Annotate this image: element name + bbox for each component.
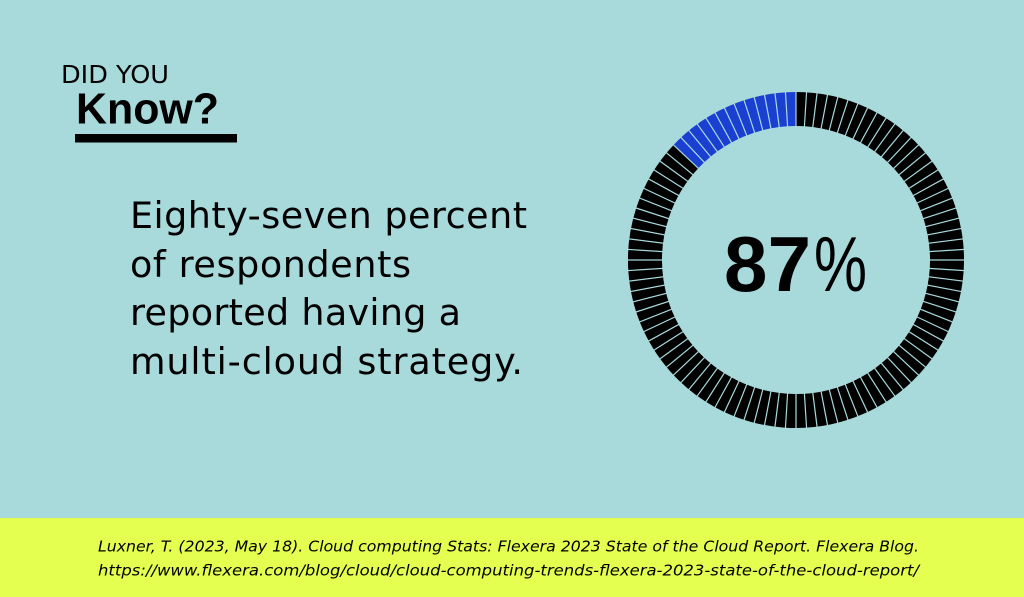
citation text: https://www.flexera.com/blog/cloud/cloud-computing-trends-flexera-2023-state-of-the-cloud-report/: [98, 562, 921, 580]
heading line: know: Know?: [76, 84, 219, 134]
gauge value: %: [814, 220, 867, 308]
text block: statistic statement: reported having a: [130, 291, 461, 334]
text block: statistic statement: multi-cloud strategy.: [130, 340, 523, 383]
heading: did you know: [61, 60, 237, 142]
text block: statistic statement: of respondents: [130, 243, 411, 286]
gauge value: [724, 220, 867, 308]
citation text: Luxner, T. (2023, May 18). Cloud computing Stats: Flexera 2023 State of the Cloud Report. Flexera Blog.: [98, 538, 919, 556]
gauge value: 87: [724, 220, 811, 308]
black arc: 87 percent: [645, 109, 947, 411]
segment separators: [621, 85, 971, 435]
heading line: did you: DID YOU: [61, 60, 169, 89]
footer band: [0, 518, 1024, 597]
citation text: [98, 538, 921, 580]
blue arc: remaining 13 percent: [686, 109, 796, 157]
chart: 87 percent radial gauge: [621, 85, 971, 435]
text block: statistic statement: [130, 194, 527, 383]
text block: statistic statement: Eighty-seven percent: [130, 194, 527, 237]
heading underline: [75, 134, 237, 142]
